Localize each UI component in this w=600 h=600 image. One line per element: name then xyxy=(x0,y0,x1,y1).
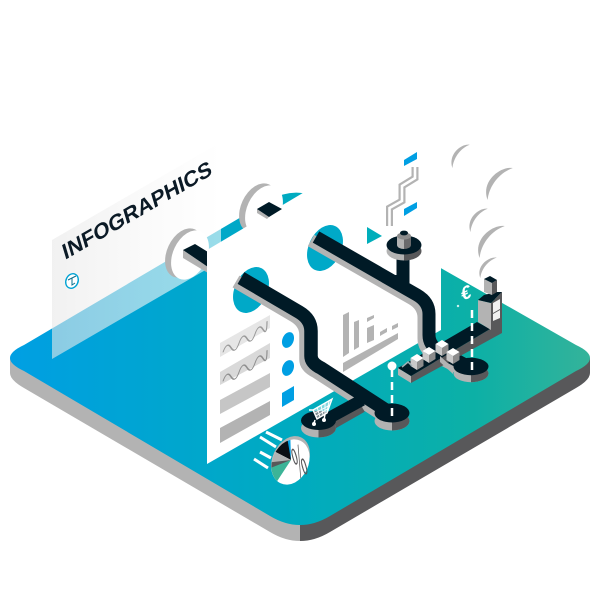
factory windows xyxy=(493,299,500,321)
platform base xyxy=(10,358,590,541)
cubes xyxy=(402,340,460,370)
top node with cap xyxy=(386,231,422,283)
ring 2 stub xyxy=(257,202,282,219)
panel hole 1 xyxy=(226,261,276,319)
pipe A xyxy=(241,278,392,414)
translucent infographics panel xyxy=(52,142,221,359)
platform top surface xyxy=(10,193,590,525)
ring 2 xyxy=(232,177,290,241)
bar chart xyxy=(343,312,398,372)
pipe B xyxy=(316,237,471,368)
wave line 1 xyxy=(223,321,267,357)
conveyor slab xyxy=(398,322,502,383)
report rows xyxy=(220,315,270,443)
panel hole 2 xyxy=(300,219,350,277)
chimney xyxy=(484,276,497,295)
blue tags xyxy=(404,152,417,216)
icon: rupee badge xyxy=(63,272,81,290)
cart node xyxy=(301,411,336,438)
pie chart xyxy=(271,436,310,485)
white report panel xyxy=(207,190,441,464)
zigzag line xyxy=(390,166,415,227)
junction underside xyxy=(440,356,453,374)
cart branch xyxy=(318,400,362,432)
percent sign: % xyxy=(286,435,313,489)
speed lines xyxy=(254,432,282,468)
ring 1 with connector stub xyxy=(158,222,216,286)
factory xyxy=(478,276,502,333)
right node xyxy=(454,358,489,382)
smoke xyxy=(451,145,513,278)
icon: shopping cart xyxy=(309,399,332,426)
arrow: teal triangle xyxy=(367,227,382,244)
panel title: INFOGRAPHICS xyxy=(60,156,214,265)
dashed connector with euro: € xyxy=(458,280,474,305)
pipe A shadow xyxy=(236,282,387,418)
terminal node xyxy=(374,404,410,430)
pipe B shadow xyxy=(311,240,466,372)
wave line 2 xyxy=(223,350,267,386)
report bullets xyxy=(280,330,296,407)
dashed connector with euro xyxy=(457,280,474,370)
dashed connector with dot xyxy=(388,362,396,416)
